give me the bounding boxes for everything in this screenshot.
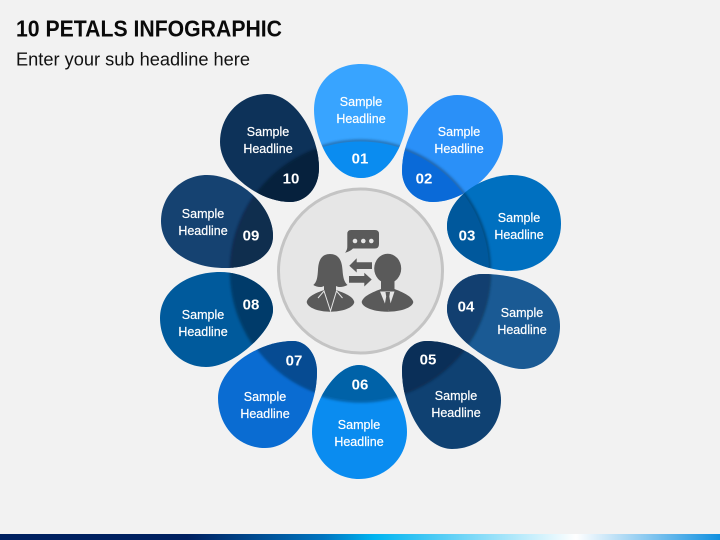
petal 06: Sample [338,418,380,432]
petal 07: 07 [286,352,302,370]
petal 10: Headline [243,142,293,156]
title: 10 PETALS INFOGRAPHIC [16,16,282,42]
petal 01: 01 [352,150,368,168]
petal 01: Sample [340,95,382,109]
petal 02 [402,95,503,202]
petal 05 [402,341,501,449]
petal 08: Headline [178,325,228,339]
petal 09 [161,175,273,268]
petal 02: Sample [438,125,480,139]
petal 08: Sample [182,308,224,322]
petal 05: Headline [431,406,481,420]
petal 04 [447,274,560,369]
petal 10: Sample [247,125,289,139]
petal 10 [220,94,319,202]
petal 05: Sample [435,389,477,403]
subtitle: Enter your sub headline here [16,50,250,70]
petal 06: Headline [334,435,384,449]
petal 04: Sample [501,306,543,320]
petal 08 [160,272,273,367]
center circle [278,189,442,353]
petal 10: 10 [283,170,299,188]
icon: speech bubble [345,230,379,253]
petal 09: 09 [243,228,259,244]
petal 03: Headline [494,228,544,242]
petal 09: Sample [182,207,224,221]
petal 06 [312,365,407,479]
bottom gradient bar [0,534,720,540]
petal 02: Headline [434,142,484,156]
petal 01: Headline [336,112,386,126]
petal 03 [447,175,561,271]
petal 08: 08 [243,296,259,314]
icon: two people talking [307,230,413,312]
icon: woman [307,254,354,312]
petal 04: Headline [497,323,547,337]
petal 02: 02 [416,170,432,188]
icon: exchange arrows [349,258,372,286]
petal 03: 03 [459,228,475,244]
icon: man [362,254,413,312]
petal 06: 06 [352,376,368,394]
petal 07: Headline [240,407,290,421]
petal 07 [218,341,317,448]
petal 04: 04 [458,298,475,316]
petal 03: Sample [498,211,540,225]
petal 01 [314,64,408,178]
petal 05: 05 [420,352,436,368]
petal 07: Sample [244,390,286,404]
petal 09: Headline [178,224,228,238]
